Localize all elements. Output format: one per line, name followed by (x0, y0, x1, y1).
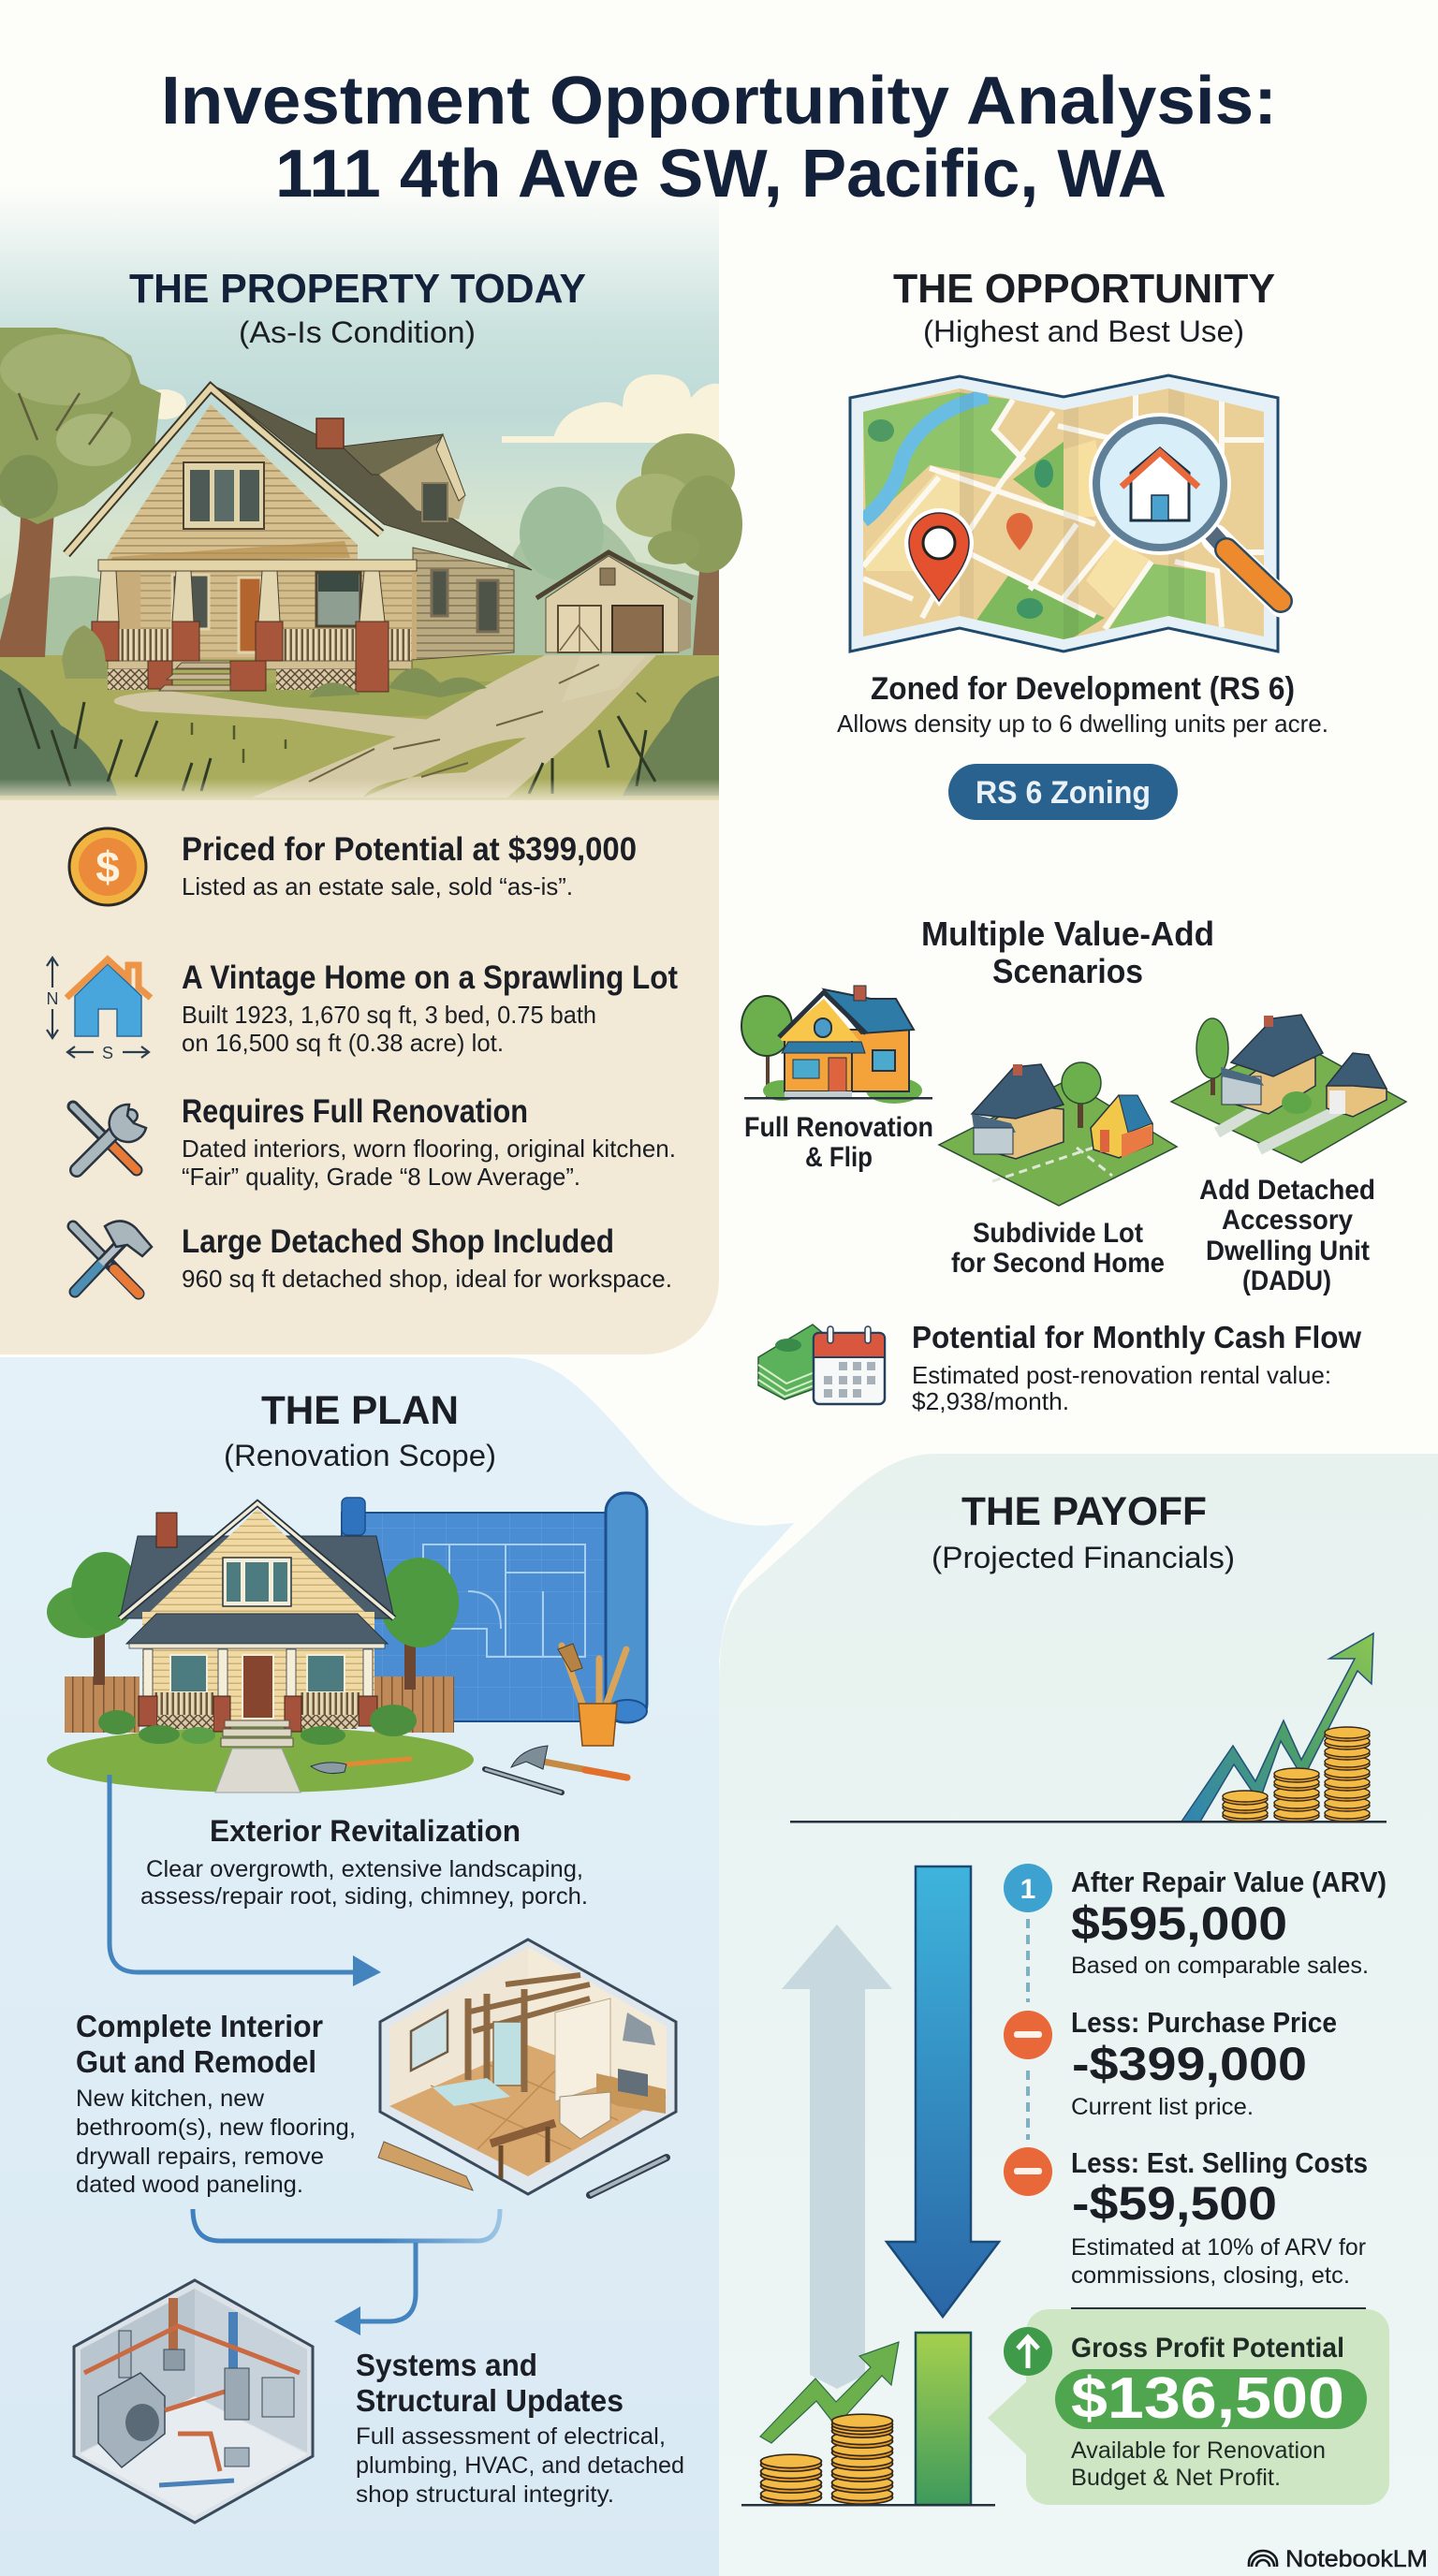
illustration: isometric building systems (74, 2280, 313, 2523)
icon: cash and calendar (758, 1325, 885, 1404)
heading: the payoff: THE PAYOFF (961, 1489, 1207, 1534)
paint cup and brushes (562, 1646, 626, 1704)
text: complete interior: drywall repairs, remove (76, 2144, 324, 2170)
item: requires full renovation (73, 1093, 676, 1191)
step: less selling costs (1004, 2146, 1368, 2289)
icon: blue house with lot dimensions (47, 958, 151, 1062)
step: less purchase price: Current list price. (1071, 2094, 1254, 2120)
scenario: add DADU (1171, 1015, 1406, 1296)
text: zoned for development (837, 671, 1328, 738)
step: less selling costs: Less: Est. Selling Costs (1071, 2146, 1368, 2179)
badge: rs 6 zoning: RS 6 Zoning (976, 775, 1151, 811)
title (161, 64, 1277, 212)
text: systems and structural updates (356, 2348, 684, 2508)
step: less selling costs: Estimated at 10% of ARV for (1071, 2234, 1366, 2261)
icon: hammer and screwdriver (73, 1221, 152, 1294)
text: complete interior: dated wood paneling. (76, 2172, 303, 2198)
callout: gross profit potential: Available for Renovation (1071, 2437, 1326, 2464)
faded up arrow (782, 1925, 892, 2389)
arrow: interior to systems (193, 2209, 500, 2335)
scenario: full renovation and flip: & Flip (805, 1142, 873, 1173)
item: priced for potential: Priced for Potential at $399,000 (182, 831, 637, 868)
left overgrown brush (0, 669, 117, 796)
panel: the plan (0, 1357, 794, 2576)
scenario: full renovation and flip: Full Renovation (744, 1112, 933, 1143)
icon: dollar coin (69, 828, 146, 905)
icon: renovated house (741, 986, 932, 1104)
icon: step number one: 1 (1020, 1874, 1035, 1905)
panel: the opportunity (741, 266, 1406, 1415)
scenario: add DADU: (DADU) (1242, 1266, 1331, 1296)
item: vintage home (47, 958, 678, 1062)
title: 111 4th Ave SW, Pacific, WA (275, 137, 1167, 212)
item: monthly cash flow: $2,938/month. (912, 1387, 1069, 1415)
big down arrow (887, 1866, 999, 2317)
text: complete interior: bethroom(s), new flooring, (76, 2115, 356, 2141)
icon: blue house with lot dimensions: S (102, 1044, 113, 1062)
left tree (0, 328, 161, 657)
shovel (346, 1759, 410, 1764)
item: vintage home: A Vintage Home on a Sprawling Lot (182, 959, 678, 996)
detached garage (536, 552, 693, 652)
scenario: subdivide lot: for Second Home (951, 1248, 1165, 1279)
icon: minus (1004, 2011, 1052, 2059)
text: complete interior: New kitchen, new (76, 2086, 265, 2112)
small orange marker (1006, 513, 1033, 550)
item: requires full renovation: “Fair” quality, Grade “8 Low Average”. (182, 1163, 580, 1191)
heading: multiple value-add scenarios: Scenarios (992, 952, 1143, 990)
chart: waterfall arrows and profit bar (741, 1866, 999, 2507)
scenario: subdivide lot: Subdivide Lot (973, 1218, 1143, 1249)
blueprint roll (342, 1493, 647, 1722)
trees (94, 1629, 105, 1685)
icon: house with accessory dwelling (1171, 1015, 1406, 1163)
text: exterior revitalization: Clear overgrowth, extensive landscaping, (146, 1856, 583, 1882)
item: monthly cash flow: Potential for Monthly Cash Flow (912, 1320, 1361, 1354)
logo: NotebookLM: NotebookLM (1285, 2546, 1428, 2572)
text: exterior revitalization (140, 1814, 588, 1910)
icon: minus (1004, 2147, 1052, 2196)
callout: gross profit potential (988, 2309, 1389, 2505)
small green arrow (760, 2342, 899, 2443)
text: complete interior: Gut and Remodel (76, 2044, 316, 2079)
item: monthly cash flow (758, 1320, 1361, 1415)
icon: dollar coin: $ (95, 842, 120, 891)
illustration: as-is craftsman house scene (0, 328, 742, 807)
text: exterior revitalization: assess/repair root, siding, chimney, porch. (140, 1883, 588, 1910)
item: large detached shop: Large Detached Shop Included (182, 1223, 614, 1260)
callout: gross profit potential: $136,500 (1071, 2366, 1344, 2431)
subheading: as-is condition: (As-Is Condition) (239, 315, 476, 349)
text: zoned for development: Allows density up to 6 dwelling units per acre. (837, 710, 1328, 738)
magnifying glass with house (1089, 413, 1283, 604)
heading: the opportunity: THE OPPORTUNITY (893, 266, 1275, 312)
text: systems and structural updates: Structural Updates (356, 2383, 624, 2418)
item: priced for potential: Listed as an estate sale, sold “as-is”. (182, 872, 573, 900)
subheading: highest and best use: (Highest and Best Use) (923, 315, 1244, 348)
right overgrown brush (623, 676, 719, 796)
heading: the property today: THE PROPERTY TODAY (129, 266, 586, 312)
scenario: add DADU: Add Detached (1199, 1175, 1375, 1206)
text: exterior revitalization: Exterior Revitalization (210, 1814, 521, 1848)
step: less purchase price: Less: Purchase Price (1071, 2006, 1337, 2039)
icon: step number one (1004, 1864, 1052, 1912)
callout: gross profit potential: Budget & Net Profit. (1071, 2465, 1281, 2491)
badge: rs 6 zoning (948, 764, 1178, 820)
icon: blue house with lot dimensions: N (47, 989, 58, 1008)
step: less purchase price (1004, 2006, 1337, 2120)
item: requires full renovation: Requires Full Renovation (182, 1093, 528, 1130)
step: after repair value: After Repair Value (ARV) (1071, 1866, 1387, 1898)
scenario: full renovation and flip (741, 986, 933, 1173)
text: systems and structural updates: plumbing, HVAC, and detached (356, 2452, 684, 2479)
text: systems and structural updates: Systems and (356, 2348, 537, 2382)
map pin (904, 508, 974, 607)
step: less selling costs: -$59,500 (1072, 2177, 1277, 2230)
icon: subdivided lot (939, 1062, 1177, 1206)
ground (47, 1727, 474, 1793)
item: large detached shop (73, 1221, 672, 1294)
text: zoned for development: Zoned for Development (RS 6) (871, 671, 1295, 707)
scenario: add DADU: Accessory (1222, 1205, 1353, 1236)
item: vintage home: on 16,500 sq ft (0.38 acre) lot. (182, 1029, 504, 1057)
illustration: isometric interior remodel (378, 1939, 676, 2195)
house (120, 1536, 394, 1618)
hammer and wrench (534, 1760, 627, 1778)
heading: multiple value-add scenarios: Multiple Value-Add (921, 915, 1214, 953)
subheading: projected financials: (Projected Financials) (932, 1541, 1235, 1574)
arrow: exterior to interior (110, 1775, 381, 1986)
icon: zoning map with pin and magnifier (850, 375, 1283, 651)
subheading: renovation scope: (Renovation Scope) (224, 1439, 496, 1472)
item: large detached shop: 960 sq ft detached shop, ideal for workspace. (182, 1265, 672, 1293)
right tree (616, 433, 742, 655)
illustration: renovated house with blueprint (47, 1493, 647, 1793)
step: less selling costs: commissions, closing, etc. (1071, 2262, 1350, 2289)
step connectors (1026, 1919, 1030, 2140)
scenario: subdivide lot (939, 1062, 1177, 1279)
step: less purchase price: -$399,000 (1072, 2038, 1307, 2090)
item: vintage home: Built 1923, 1,670 sq ft, 3 bed, 0.75 bath (182, 1001, 596, 1029)
text: systems and structural updates: shop structural integrity. (356, 2481, 614, 2508)
text: complete interior (76, 2009, 356, 2198)
callout: gross profit potential: Gross Profit Potential (1071, 2333, 1344, 2364)
overgrown lawn and cracked path (205, 681, 512, 719)
chart: rising arrow and coin stacks (790, 1633, 1387, 1823)
item: requires full renovation: Dated interiors, worn flooring, original kitchen. (182, 1134, 676, 1163)
title: Investment Opportunity Analysis: (161, 64, 1277, 139)
item: monthly cash flow: Estimated post-renovation rental value: (912, 1361, 1331, 1389)
panel: the property today (0, 187, 742, 1354)
step: after repair value (1004, 1864, 1387, 1979)
small coin stacks (761, 2487, 821, 2504)
panel: the payoff (719, 1454, 1438, 2576)
icon: up arrow (1004, 2327, 1052, 2376)
icon: wrench and screwdriver (73, 1105, 146, 1170)
step: after repair value: $595,000 (1071, 1897, 1287, 1950)
profit bar (916, 2333, 971, 2505)
panel background: beige details area (0, 786, 719, 1354)
scenario: add DADU: Dwelling Unit (1206, 1236, 1370, 1266)
step: after repair value: Based on comparable sales. (1071, 1953, 1369, 1979)
heading: the plan: THE PLAN (261, 1388, 459, 1433)
house (62, 388, 532, 697)
heading: multiple value-add scenarios (921, 915, 1214, 990)
item: priced for potential (69, 828, 637, 905)
text: complete interior: Complete Interior (76, 2009, 323, 2043)
fence (65, 1676, 139, 1733)
text: systems and structural updates: Full assessment of electrical, (356, 2423, 666, 2450)
